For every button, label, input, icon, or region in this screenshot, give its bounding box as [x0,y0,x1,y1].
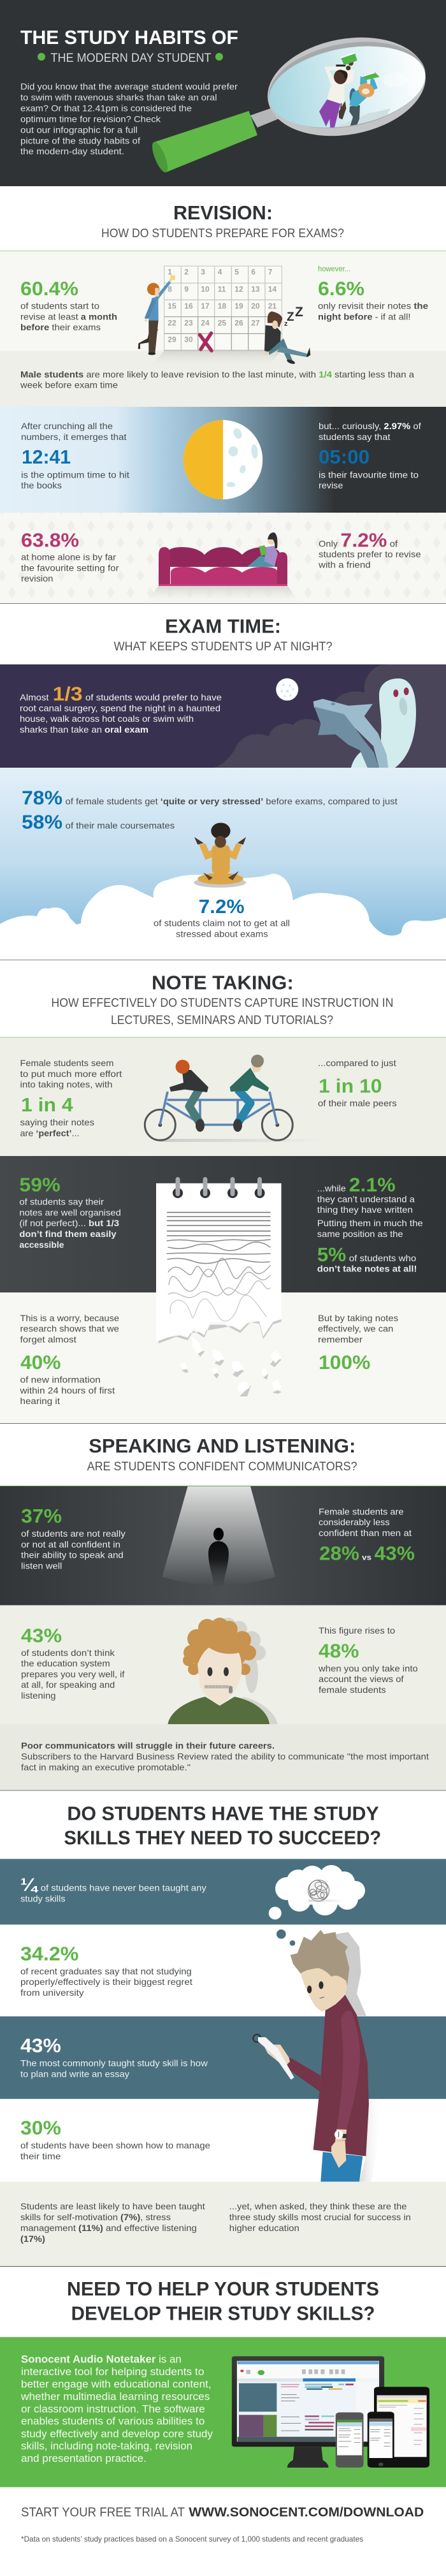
stat: 34.2%: properly/effectively is their biggest regret [20,1977,192,1987]
stat: 40% forgotten: forget almost [20,1334,76,1344]
stat: 37%: listen well [21,1560,62,1570]
stat: 6.6%: only revisit their notes the [318,301,428,311]
panel: essay skills [0,2016,446,2099]
falling paper fragments [180,1336,282,1396]
icon: half sun half moon [183,420,263,499]
torso [327,80,345,104]
scribble ball [306,1878,329,1901]
student pinning a note [138,275,175,355]
stat: 28% vs 43%: considerably less [319,1517,390,1527]
calendar illustration: 7 [268,268,273,277]
panel: note quality [0,1156,446,1292]
heading: speaking and listening: SPEAKING AND LISTENING: [89,1435,356,1457]
intro paragraph [20,82,238,156]
stat: 40% forgotten: research shows that we [20,1324,119,1334]
stat: 60.4%: revise at least a month [20,311,117,321]
text: 1/3 fear oral exams [20,683,222,735]
stat: 43% essay [20,2034,208,2079]
stat: 43% education: of students don’t think [21,1648,115,1658]
text: 05:00: revise [319,480,343,490]
stat: 30% time management: of students have been shown how to manage [20,2141,210,2151]
stat: 43% essay: to plan and write an essay [20,2069,129,2079]
call to action: free trial: START YOUR FREE TRIAL AT [21,2506,185,2520]
text: most crucial: higher education [229,2223,299,2233]
trousers [319,99,340,128]
text: most crucial: ...yet, when asked, they think these are the [229,2201,407,2211]
meditating student [194,823,246,888]
stat: 7.2%: with a friend [318,560,371,570]
calendar illustration: 3 [201,268,205,277]
calendar illustration: 12 [234,284,243,293]
stat: 1 in 10: of their male peers [318,1098,397,1108]
heading: note taking: LECTURES, SEMINARS AND TUTORIALS? [111,1013,333,1027]
stat: 28% vs 43%: vs [362,1553,371,1562]
text: product description: study effectively and develop core study [21,2427,213,2440]
stat: 43% education: 43% [21,1624,62,1646]
stat: 1 in 4 [20,1058,122,1138]
stat: 28% vs 43%: Female students are [319,1506,404,1516]
stat: 100% remembered: remember [318,1334,363,1344]
stat: 43% education: at all, for speaking and [21,1680,115,1690]
phone two [368,2411,394,2468]
heading: note taking [51,972,393,1027]
stat: 78% and 58% stressed: of their male coursemates [66,820,175,830]
stat: 37% [21,1505,126,1570]
calendar illustration: 8 [168,284,172,293]
text: most crucial [229,2201,411,2233]
panel: sonocent product [0,2337,446,2487]
note: poor communicators: Subscribers to the Harvard Business Review rated the ability to communicate "the most important [21,1752,429,1762]
stat: 59%: 59% [19,1174,61,1196]
heading: note taking: HOW EFFECTIVELY DO STUDENTS CAPTURE INSTRUCTION IN [51,996,393,1010]
calendar illustration: 24 [201,318,210,327]
text: 1/3 fear oral exams: Almost [20,692,49,703]
text: 1/3 fear oral exams: of students would prefer to have [85,692,222,703]
backpack [349,88,356,102]
stat: 1 in 10: 1 in 10 [319,1075,382,1097]
text: least taught: management (11%) and effective listening [20,2223,197,2233]
panel: tandem bicycle [0,1037,446,1156]
stat: 7.2%: students prefer to revise [319,549,421,559]
notebook rings [173,1177,265,1198]
calendar illustration: 25 [218,318,226,327]
stat: 28% vs 43%: 43% [375,1542,415,1564]
stat: 7.2% [318,529,421,570]
stat: 2.1% and 5%: of students who [349,1253,416,1263]
stat: 48%: account the views of [319,1674,404,1684]
stat: 43% essay: The most commonly taught study skill is how [20,2058,208,2068]
stat: 7.2%: of [390,538,398,548]
intro paragraph: the modern-day student. [20,146,124,156]
stat: 7.2%: 7.2% [340,529,387,551]
heading: speaking and listening: ARE STUDENTS CONFIDENT COMMUNICATORS? [87,1460,357,1474]
text: product description [20,2353,213,2464]
icon: magnifying glass with students [152,37,426,172]
stat: 30% time management: 30% [20,2116,61,2139]
intro paragraph: exam? Or that 12.41pm is considered the [20,103,192,113]
stat: 2.1% and 5%: ...while [317,1183,346,1194]
stat: 40% forgotten: This is a worry, because [20,1313,119,1323]
calendar illustration: 19 [234,302,243,311]
panel: when students start revising [0,251,446,407]
heading: speaking and listening [87,1435,357,1474]
text: 12:41: After crunching all the [21,421,113,431]
calendar illustration: 6 [251,268,255,277]
stat: 40% forgotten: of new information [20,1375,101,1385]
stat: 100% remembered: But by taking notes [318,1313,398,1323]
tablet [374,2387,429,2468]
panel: spotlight [0,1486,446,1606]
stat: 2.1% and 5% [317,1174,423,1274]
stat: 63.8%: revision [21,573,53,583]
note: male students: Male students are more likely to leave revision to the last minute, with 1/4 starting less than a [20,369,414,379]
calendar illustration: 23 [184,318,193,327]
calendar illustration: 17 [201,302,210,311]
calendar illustration: 9 [184,284,189,293]
call to action: free trial [21,2506,424,2520]
stat: 7.2% not stressed: stressed about exams [176,928,268,939]
calendar illustration: 13 [251,284,260,293]
heading: study skills [64,1803,381,1849]
calendar illustration: 10 [201,284,210,293]
heading: note taking: NOTE TAKING: [152,972,294,993]
text: 12:41: numbers, it emerges that [21,432,127,442]
intro paragraph: picture of the study habits of [20,135,140,145]
stat: 28% vs 43%: 28% [319,1542,359,1564]
title: THE STUDY HABITS OF [20,26,238,48]
stat: 63.8%: the favourite setting for [21,562,119,573]
stat: 48%: This figure rises to [319,1625,395,1636]
calendar illustration: 5 [234,268,239,277]
silhouette student [208,1528,229,1587]
heading: exam time: EXAM TIME: [165,616,281,638]
icon: shark [313,699,388,768]
heading: study skills: SKILLS THEY NEED TO SUCCEED? [64,1827,381,1849]
calendar illustration: Z [295,305,303,319]
stat: 59%: don’t find them easily [19,1229,117,1239]
stat: 2.1% and 5%: 2.1% [349,1174,396,1196]
phone one [336,2412,363,2468]
calendar illustration: 30 [184,335,193,344]
text: product description: or classroom instruction. The software [21,2403,205,2415]
text: 05:00: but... curiously, 2.97% of [319,421,421,431]
text: least taught: skills for self-motivation (7%), stress [20,2212,171,2222]
notes deteriorating into scribble [167,1212,270,1321]
text: 1/3 fear oral exams: sharks than take an oral exam [20,724,148,735]
night clouds [213,664,446,768]
stat: 6.6%: night before - if at all! [318,311,410,321]
stat: 7.2%: Only [319,538,338,548]
stat: 1 in 4: into taking notes, with [20,1079,112,1090]
text: 12:41 [21,421,129,490]
text: product description: better engage with educational content, [21,2378,212,2390]
note: poor communicators [21,1741,429,1772]
text: 05:00: students say that [319,432,391,442]
note: poor communicators: fact in making an executive promotable." [21,1762,191,1772]
text: 1/3 fear oral exams: 1/3 [53,683,83,705]
panel: memory [0,1292,446,1424]
text: 12:41: 12:41 [22,446,71,468]
stat: 60.4%: of students start to [20,301,99,311]
stat: 1 in 10: ...compared to just [318,1058,396,1068]
illustration: student looking at phone [253,1929,382,2182]
stat: 7.2% not stressed [154,895,290,939]
intro paragraph: to swim with ravenous sharks than take an oral [20,92,217,103]
reader on sofa [247,556,275,567]
stat: 6.6%: 6.6% [318,277,364,300]
calendar illustration: 14 [268,284,277,293]
stat: 48% [318,1625,418,1695]
calendar illustration: 11 [218,284,226,293]
heading: revision: HOW DO STUDENTS PREPARE FOR EXAMS? [101,226,344,240]
stat: 2.1% and 5%: same position as the [317,1229,403,1239]
calendar illustration: 4 [218,268,222,277]
text: product description: enables students of various abilities to [21,2415,205,2427]
stat: 30% time management: their time [20,2151,61,2162]
stat: 59%: accessible [19,1240,64,1250]
text: 05:00: is their favourite time to [319,469,419,479]
stat: 7.2% not stressed: of students claim not to get at all [154,918,290,928]
stat: 1 in 4: to put much more effort [20,1069,122,1079]
bag [340,103,342,108]
calendar illustration: 16 [184,302,193,311]
stat: 2.1% and 5%: they can’t understand a [317,1194,415,1204]
stat: 59%: of students say their [19,1197,104,1207]
panel: where students revise [0,513,446,604]
note: male students: week before exam time [20,380,118,390]
stat: 28% vs 43%: confident than men at [319,1528,412,1538]
stat: 34.2%: 34.2% [20,1943,79,1965]
calendar illustration [138,266,310,367]
stat: 34.2% [20,1943,192,1998]
stat: 1/4: ¼ [20,1875,39,1896]
stat: 43% education: the education system [21,1658,110,1669]
heading: revision: REVISION: [173,202,273,224]
icon: crumbling notebook [156,1177,282,1396]
panel: never taught [0,1859,446,1924]
panel: biggest regret [0,1924,446,2016]
stat: 43% essay: 43% [20,2034,61,2056]
stat: 6.6%: however... [318,266,350,274]
stat: 2.1% and 5%: don’t take notes at all! [317,1264,417,1274]
text: 05:00 [319,421,421,490]
text: product description: Sonocent Audio Notetaker is an [21,2353,182,2366]
stat: 1/4: of students have never been taught any [41,1883,206,1893]
stat: 1 in 10 [318,1058,397,1108]
heading: call to action: DEVELOP THEIR STUDY SKILLS? [71,2303,375,2325]
calendar illustration: 20 [251,302,260,311]
stat: 1/4 [20,1875,206,1904]
heading: call to action [67,2278,379,2325]
stat: 2.1% and 5%: thing they have written [317,1204,413,1215]
stat: 100% remembered: 100% [319,1351,370,1373]
subtitle with green dots: THE MODERN DAY STUDENT [51,51,212,65]
stat: 48%: when you only take into [318,1663,418,1673]
text: 05:00: 05:00 [319,446,370,468]
calendar illustration: 21 [268,302,277,311]
heading: exam time: WHAT KEEPS STUDENTS UP AT NIGHT? [114,640,333,654]
icon: ghost [351,678,416,768]
text: least taught: Students are least likely to have been taught [20,2201,205,2211]
stat: 37%: their ability to speak and [21,1550,124,1560]
stat: 34.2%: from university [20,1987,84,1998]
calendar illustration: 2 [184,268,189,277]
stat: 6.6% [318,266,428,321]
stat: 63.8%: 63.8% [21,529,79,551]
calendar illustration: 15 [168,302,176,311]
icon: thought bubble [269,1865,365,1919]
stat: 7.2% not stressed: 7.2% [199,895,245,918]
panel: best time to revise [0,407,446,513]
calendar illustration: 26 [234,318,243,327]
stat: 48%: female students [319,1685,386,1695]
stat: 63.8% [21,529,119,583]
footnote: *Data on students’ study practices based on a Sonocent survey of 1,000 students and recent graduates [21,2535,363,2543]
stat: 78% and 58% stressed: of female students get ‘quite or very stressed’ before exams, compared to just [66,796,398,806]
calendar illustration: z [284,320,288,328]
right rider [238,1090,250,1123]
calendar illustration: 1 [168,268,172,277]
stat: 40% forgotten [19,1313,119,1406]
white clouds [0,874,446,960]
stat: 78% and 58% stressed: 78% [22,786,62,809]
stat: 2.1% and 5%: Putting them in much the [317,1218,423,1228]
stat: 60.4%: before their exams [20,322,101,332]
intro paragraph: optimum time for revision? Check [20,113,161,124]
stat: 43% education: listening [21,1690,56,1701]
stat: 59%: (if not perfect)... but 1/3 [19,1218,119,1228]
stat: 40% forgotten: within 24 hours of first [19,1385,115,1395]
stat: 1/4: study skills [20,1894,65,1904]
text: 12:41: the books [21,480,62,490]
heading: call to action: NEED TO HELP YOUR STUDENTS [67,2278,379,2300]
stat: 1 in 4: Female students seem [20,1058,113,1068]
icon: moon [276,678,298,701]
stat: 40% forgotten: hearing it [20,1396,60,1406]
calendar illustration: 27 [251,318,260,327]
note: male students [20,369,414,390]
icon: student with zipped mouth [168,1618,278,1724]
stat: 1 in 4: 1 in 4 [21,1094,73,1116]
stat: 40% forgotten: 40% [20,1351,61,1373]
text: least taught: (17%) [20,2234,45,2244]
heading: study skills: DO STUDENTS HAVE THE STUDY [67,1803,379,1824]
text: product description: interactive tool for helping students to [21,2366,204,2378]
sofa illustration [147,532,299,603]
stat: 37%: of students are not really [21,1528,126,1539]
spotlight beam [162,1486,275,1585]
panel: least taught skills [0,2182,446,2267]
text: 12:41: is the optimum time to hit [21,469,129,479]
stat: 78% and 58% stressed [22,786,398,833]
left rider [189,1090,200,1123]
sleeping student [264,311,310,365]
text: least taught [20,2201,205,2244]
stat: 37%: or not at all confident in [21,1539,120,1549]
text: 1/3 fear oral exams: root canal surgery, spend the night in a haunted [20,703,220,713]
calendar illustration: 18 [218,302,226,311]
stat: 43% education: prepares you very well, if [21,1669,125,1679]
stat: 34.2%: of recent graduates say that not studying [20,1966,192,1976]
note: poor communicators: Poor communicators will struggle in their future careers. [21,1741,275,1751]
monitor [232,2356,384,2468]
stat: 28% vs 43% [319,1506,415,1564]
stat: 60.4% [20,277,117,332]
text: most crucial: three study skills most crucial for success in [229,2212,411,2222]
text: product description: whether multimedia learning resources [20,2390,210,2403]
stat: 59%: notes are well organised [19,1207,121,1217]
stat: 1 in 4: are ‘perfect’... [20,1128,79,1138]
intro paragraph: Did you know that the average student would prefer [20,82,238,92]
illustration: monitor, tablet and phones [232,2356,429,2468]
text: product description: skills, including note-taking, revision [21,2440,192,2452]
call to action: free trial: WWW.SONOCENT.COM/DOWNLOAD [189,2506,424,2520]
panel: exam fears [0,664,446,768]
stat: 43% education [21,1624,125,1701]
stat: 30% time management [20,2116,210,2162]
stat: 78% and 58% stressed: 58% [22,810,62,833]
calendar illustration: 22 [168,318,176,327]
stat: 1 in 4: saying their notes [20,1117,94,1127]
stat: 37%: 37% [21,1505,62,1527]
icon: tandem bicycle [145,1055,322,1142]
stat: 63.8%: at home alone is by far [21,552,116,562]
stat: 60.4%: 60.4% [20,277,78,300]
stat: 2.1% and 5%: 5% [317,1243,346,1266]
text: 1/3 fear oral exams: house, walk across hot coals or swim with [20,714,194,724]
stat: 100% remembered [318,1313,398,1373]
calendar illustration: Z [287,311,294,324]
heading: exam time [114,616,333,654]
stat: 59% [19,1174,121,1250]
stat: 100% remembered: effectively, we can [318,1324,393,1334]
heading: revision [101,202,344,240]
calendar illustration: 29 [168,335,176,344]
panel: education system [0,1606,446,1790]
panel: stress levels [0,768,446,960]
stat: 48%: 48% [319,1640,359,1662]
text: product description: and presentation practice. [21,2452,147,2464]
intro paragraph: out our infographic for a full [20,124,138,135]
